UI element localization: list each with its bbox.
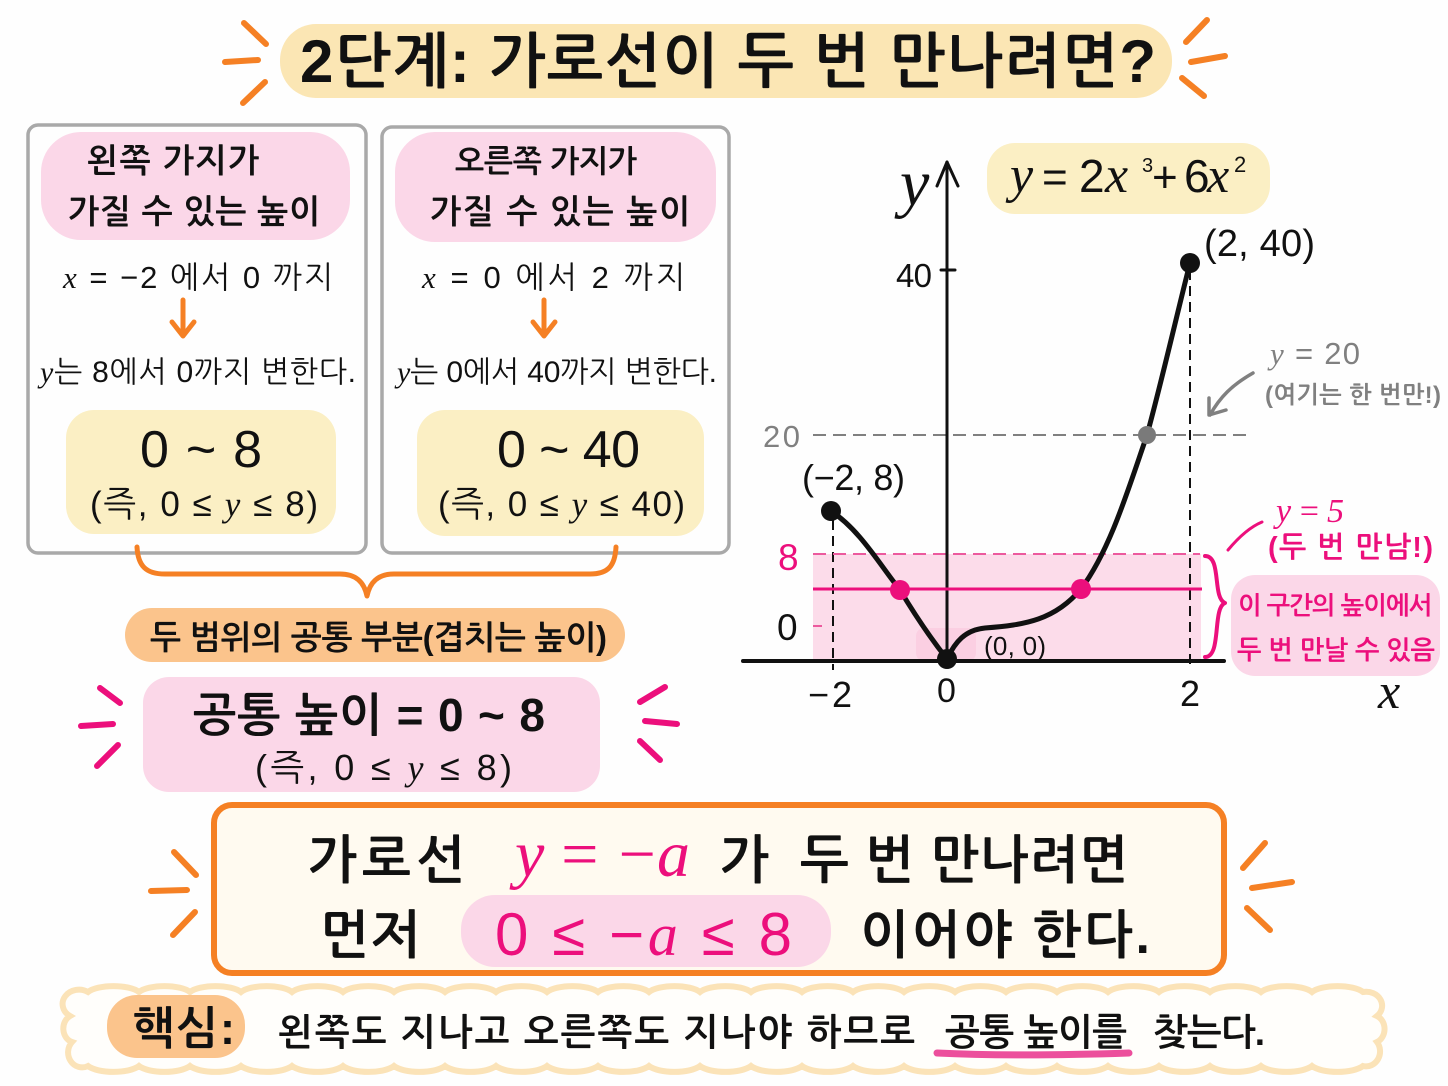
note: height range: 이 구간의 높이에서 (1238, 592, 1432, 620)
common height box: 공통 높이 = 0 ~ 8 (193, 689, 545, 741)
formula label: 3 (1142, 155, 1153, 177)
right arrow (533, 300, 555, 336)
panel: left branch (28, 125, 366, 553)
conclusion line 1: 가 (720, 832, 769, 890)
tick label 20: 20 (763, 419, 800, 454)
right range box: (즉, 0 ≤ y ≤ 40) (438, 485, 685, 524)
icon: title emphasis marks left (225, 23, 266, 103)
key sentence (278, 1012, 1265, 1053)
y axis label: y (894, 147, 930, 220)
note: height range (1231, 575, 1440, 676)
callout: y=5 twice: y = 5 (1273, 493, 1344, 530)
left arrow (172, 300, 194, 336)
point label (-2,8): (−2, 8) (802, 457, 905, 498)
formula label: + (1152, 153, 1178, 202)
left y change: y는 8에서 0까지 변한다. (37, 356, 356, 389)
chart: cubic graph (743, 147, 1400, 719)
left range box: (즉, 0 ≤ y ≤ 8) (90, 485, 318, 524)
formula label: 2 (1079, 150, 1105, 202)
common height box (143, 677, 600, 792)
callout: y=20 once: (여기는 한 번만!) (1265, 382, 1441, 409)
conclusion line 1: 두 번 만나려면 (800, 832, 1128, 890)
key sentence: 왼쪽도 지나고 오른쪽도 지나야 하므로 (278, 1012, 915, 1053)
arrow to y=20 line (1209, 373, 1253, 415)
right range box (417, 410, 704, 536)
graph points (821, 253, 1200, 669)
common part label: 두 범위의 공통 부분(겹치는 높이) (150, 619, 607, 656)
icon: title emphasis marks right (1182, 20, 1225, 96)
right branch heading: 가질 수 있는 높이 (430, 193, 690, 230)
callout: y=5 twice: (두 번 만남!) (1268, 532, 1433, 564)
conclusion line 1 (308, 818, 1128, 891)
conclusion line 2: 0 ≤ −a ≤ 8 (495, 901, 792, 968)
icon: common box marks right (640, 687, 677, 760)
key label: 핵심: (132, 1003, 235, 1054)
conclusion line 2 (320, 895, 1150, 968)
left branch heading: 가질 수 있는 높이 (68, 193, 320, 230)
tick label 0: 0 (777, 607, 798, 648)
callout: y=20 once (1209, 336, 1441, 415)
tick label 8: 8 (778, 537, 799, 578)
highlighted height band (813, 554, 1201, 661)
tick label 40: 40 (896, 257, 932, 294)
icon: conclusion marks right (1243, 843, 1292, 930)
callout: y=5 twice (1228, 493, 1433, 564)
right branch heading (395, 132, 716, 242)
formula label: 2 (1234, 152, 1246, 177)
left branch heading: 왼쪽 가지가 (87, 142, 259, 179)
dashed guides (813, 270, 1252, 670)
brace joining both ranges (137, 547, 616, 596)
right y change: y는 0에서 40까지 변한다. (394, 356, 717, 389)
axes (743, 162, 1224, 661)
conclusion line 1: y = −a (509, 818, 690, 891)
key takeaway banner (63, 986, 1385, 1072)
cubic curve (831, 263, 1190, 659)
title banner (280, 24, 1172, 98)
cloud border (63, 986, 1385, 1072)
pink brace (1205, 556, 1225, 657)
left x range: x = −2 에서 0 까지 (62, 260, 333, 295)
callout: y=20 once: y = 20 (1267, 336, 1360, 371)
right branch heading: 오른쪽 가지가 (455, 144, 637, 179)
key sentence: 찾는다. (1153, 1012, 1265, 1053)
tick label x 0: 0 (937, 672, 956, 710)
left branch heading (41, 132, 350, 240)
formula label: y (1005, 147, 1034, 204)
key label (107, 995, 245, 1058)
title text: 2단계: 가로선이 두 번 만나려면? (300, 28, 1156, 95)
x axis label: x (1377, 663, 1400, 719)
panel: right branch (382, 127, 729, 553)
icon: common box marks left (81, 688, 120, 766)
formula label: = (1042, 153, 1068, 202)
conclusion line 2: 먼저 (320, 907, 420, 965)
left range box (66, 410, 336, 534)
tick label x 2: 2 (1180, 673, 1200, 714)
common part label (125, 608, 625, 662)
formula label: x (1206, 147, 1229, 203)
tick label -2: −2 (808, 674, 852, 715)
conclusion box (214, 805, 1224, 973)
formula label: x (1104, 147, 1128, 204)
common height box: (즉, 0 ≤ y ≤ 8) (255, 747, 512, 788)
origin highlight (916, 628, 976, 661)
conclusion line 2: 이어야 한다. (860, 907, 1150, 965)
icon: conclusion marks left (151, 852, 196, 935)
key sentence: 공통 높이를 (945, 1012, 1127, 1053)
formula label: 6 (1184, 150, 1210, 202)
formula label (987, 143, 1270, 214)
line y=5 (813, 588, 1202, 590)
note: height range: 두 번 만날 수 있음 (1237, 635, 1435, 665)
right range box: 0 ~ 40 (497, 421, 640, 479)
highlight underline (937, 1053, 1129, 1055)
right x range: x = 0 에서 2 까지 (421, 260, 685, 295)
left range box: 0 ~ 8 (140, 421, 262, 479)
conclusion line 1: 가로선 (308, 832, 465, 890)
point label (0,0): (0, 0) (984, 631, 1046, 661)
point label (2,40): (2, 40) (1204, 223, 1315, 265)
